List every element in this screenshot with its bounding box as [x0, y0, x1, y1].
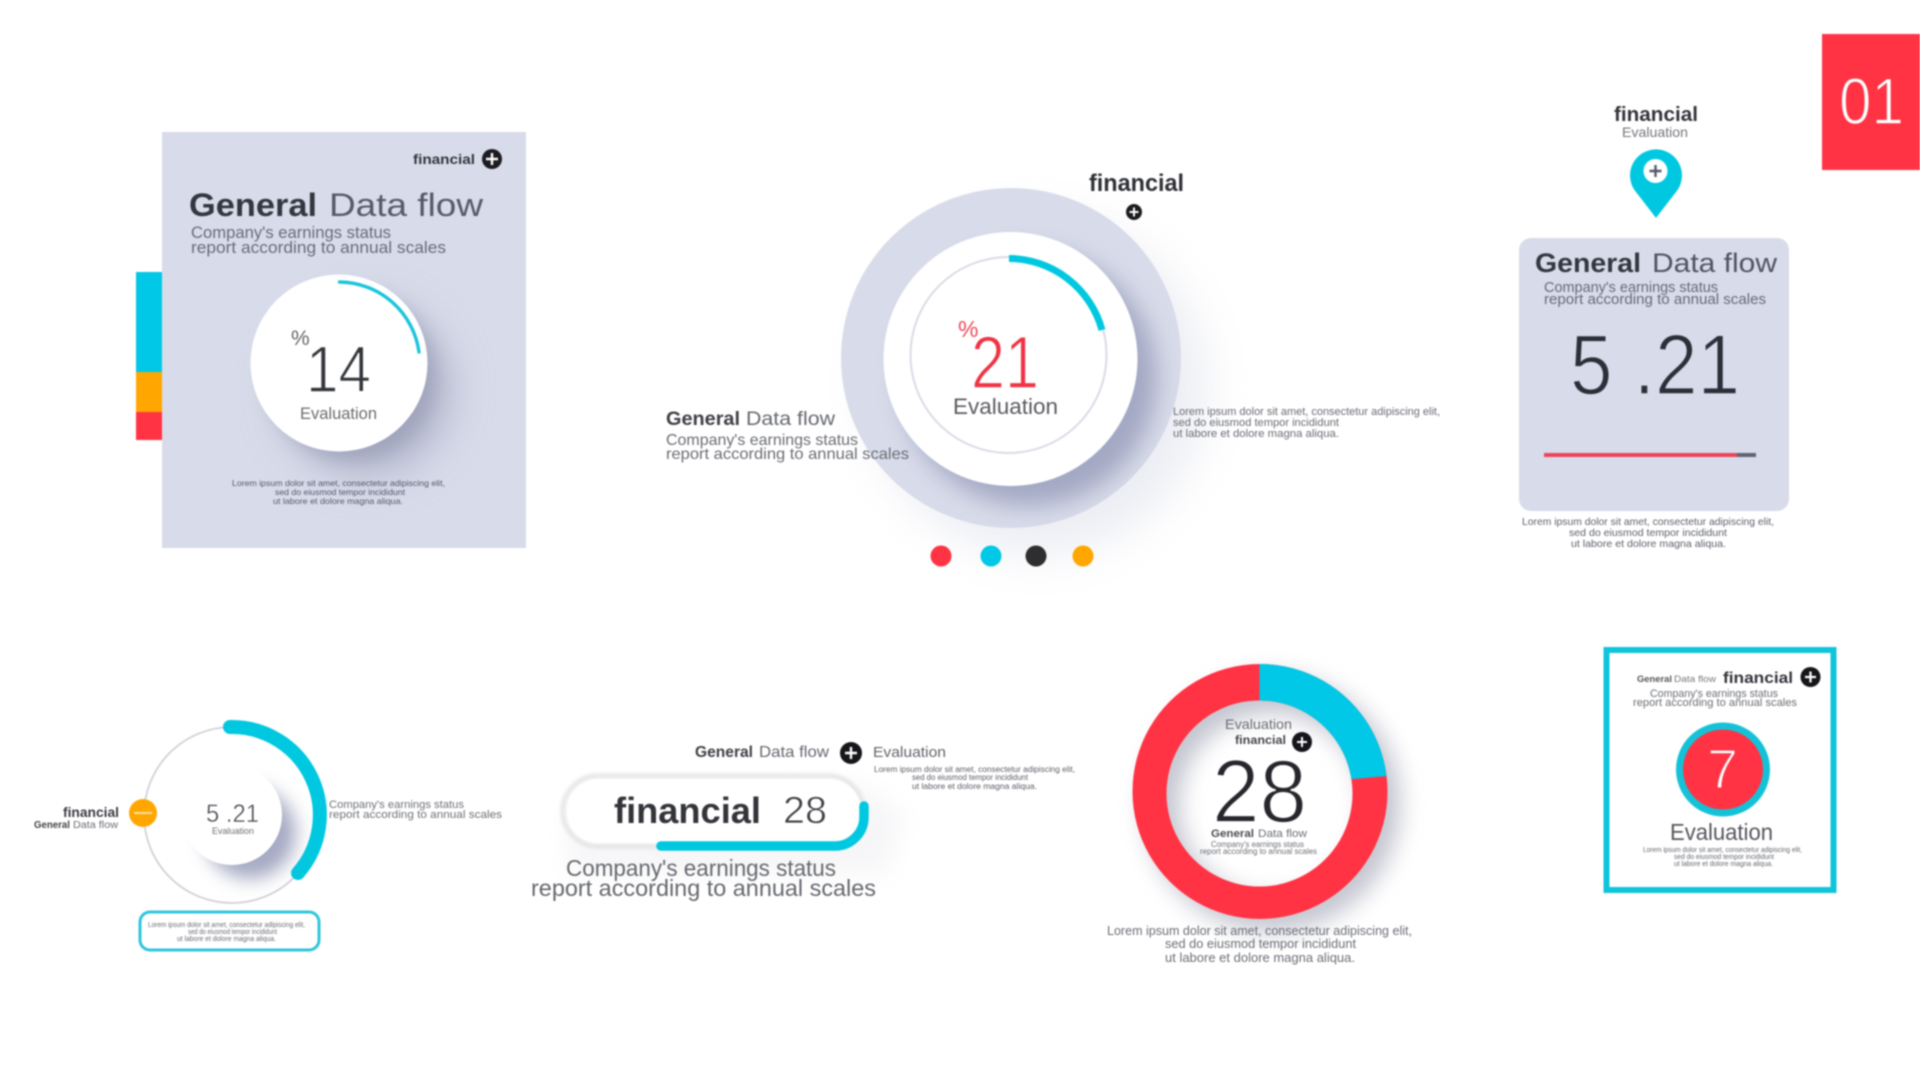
subheading: Company's earnings status — [329, 799, 464, 811]
subheading: report according to annual scales — [666, 446, 909, 463]
card header: General — [1637, 674, 1672, 684]
value: 5.21: 5 .21 — [206, 800, 259, 828]
card header — [1637, 667, 1820, 687]
body text — [1173, 406, 1440, 440]
donut labels: Evaluation — [1225, 716, 1292, 732]
callout box: Lorem ipsum dolor sit amet, consectetur adipiscing elit, — [148, 922, 305, 929]
subheading: report according to annual scales — [191, 239, 446, 257]
value circle: 7 — [1676, 722, 1770, 816]
body text: sed do eiusmod tempor incididunt — [275, 487, 406, 497]
value: 21: Evaluation — [953, 394, 1058, 419]
subheading: report according to annual scales — [1544, 292, 1766, 308]
pill text — [614, 790, 827, 832]
subheading — [191, 224, 446, 257]
callout box — [140, 912, 319, 950]
value: 21: % — [958, 316, 978, 342]
donut segments — [1133, 664, 1388, 919]
donut heading: Data flow — [1258, 828, 1307, 840]
progress bar — [1544, 453, 1756, 457]
inner white disc with arc — [884, 232, 1138, 486]
body text: sed do eiusmod tempor incididunt — [912, 773, 1029, 782]
body text — [232, 478, 445, 506]
icon: location pin with plus — [1630, 149, 1682, 218]
body text: sed do eiusmod tempor incididunt — [1674, 854, 1774, 861]
label: financial with plus icon — [413, 149, 502, 169]
body text: ut labore et dolore magna aliqua. — [1173, 428, 1339, 440]
body text — [874, 765, 1075, 791]
value: 5.21: Evaluation — [212, 826, 254, 836]
subheading: report according to annual scales — [1633, 697, 1797, 709]
pin label — [1614, 104, 1698, 140]
subheading: Company's earnings status — [191, 224, 391, 242]
subheading — [531, 855, 876, 901]
donut labels — [1225, 716, 1312, 752]
icon: orange minus — [129, 799, 157, 827]
subheading — [1544, 280, 1766, 308]
gauge: 14: 14 — [306, 332, 371, 406]
body text: Lorem ipsum dolor sit amet, consectetur adipiscing elit, — [1522, 516, 1774, 528]
card background — [1519, 238, 1789, 511]
pill text: financial — [614, 790, 761, 831]
callout box: ut labore et dolore magna aliqua. — [177, 936, 276, 943]
panel: donut chart 28 — [1107, 664, 1412, 965]
subheading: report according to annual scales — [531, 875, 876, 901]
body text: Lorem ipsum dolor sit amet, consectetur adipiscing elit, — [232, 478, 445, 488]
label: financial with plus icon: financial — [413, 151, 475, 167]
body text: sed do eiusmod tempor incididunt — [1165, 936, 1356, 951]
card header: Data flow — [1674, 674, 1717, 684]
heading — [189, 187, 484, 223]
donut heading — [1200, 828, 1317, 856]
colour strip — [136, 272, 162, 440]
body text: Lorem ipsum dolor sit amet, consectetur adipiscing elit, — [1107, 923, 1412, 938]
body text: ut labore et dolore magna aliqua. — [1165, 950, 1355, 965]
gauge: 14: % — [291, 327, 310, 350]
heading: Data flow — [746, 409, 835, 430]
gauge: 14: Evaluation — [300, 404, 377, 423]
card background — [162, 132, 526, 548]
subheading: Company's earnings status — [666, 432, 858, 449]
heading: Data flow — [1652, 248, 1778, 278]
subheading — [329, 799, 503, 821]
panel: centre gauge 21 percent — [666, 170, 1440, 566]
heading — [666, 409, 835, 430]
card header: financial — [1723, 670, 1793, 687]
pill text: 28 — [783, 790, 827, 832]
heading: General — [189, 187, 317, 223]
pill with arc — [563, 776, 905, 875]
value: 21: 21 — [971, 321, 1039, 404]
panel: top-right card 5.21 — [1519, 104, 1789, 550]
inner disc with shadow — [182, 765, 296, 879]
value: 5.21: 5 .21 — [1570, 318, 1740, 413]
donut shadow — [1145, 676, 1400, 931]
donut labels: financial — [1235, 733, 1286, 747]
value: 28: 28 — [1212, 741, 1307, 841]
outer ring with shadow — [841, 188, 1206, 554]
card frame — [1606, 650, 1834, 890]
badge: slide number 01: 01 — [1839, 64, 1904, 138]
body text: sed do eiusmod tempor incididunt — [1569, 527, 1727, 539]
heading: General — [666, 409, 740, 430]
pin label: Evaluation — [1622, 124, 1688, 140]
badge: slide number 01 — [1822, 34, 1920, 170]
body text: Lorem ipsum dolor sit amet, consectetur adipiscing elit, — [1173, 406, 1440, 418]
body text: ut labore et dolore magna aliqua. — [1571, 538, 1726, 550]
label: financial: financial — [63, 804, 119, 820]
donut heading: report according to annual scales — [1200, 847, 1317, 856]
ring and cyan arc — [144, 727, 320, 903]
evaluation label: Evaluation — [1670, 819, 1773, 845]
subheading — [666, 432, 909, 463]
body text: ut labore et dolore magna aliqua. — [1674, 861, 1773, 868]
subheading: Company's earnings status — [1650, 688, 1778, 700]
legend dots — [930, 546, 1094, 566]
subheading — [1633, 688, 1797, 709]
value: 21 — [953, 316, 1058, 419]
label: financial: Data flow — [73, 820, 119, 831]
gauge: 14 — [250, 274, 450, 474]
body text: sed do eiusmod tempor incididunt — [1173, 417, 1339, 429]
heading — [1535, 248, 1778, 278]
heading: General — [1535, 248, 1641, 278]
header row: General — [695, 744, 753, 761]
callout box: sed do eiusmod tempor incididunt — [188, 929, 277, 936]
body text — [1643, 847, 1802, 868]
subheading: report according to annual scales — [329, 809, 503, 821]
donut heading: Company's earnings status — [1211, 840, 1304, 849]
donut heading: General — [1211, 828, 1254, 840]
body text: ut labore et dolore magna aliqua. — [912, 782, 1037, 791]
label: financial with plus icon: financial — [1089, 170, 1184, 197]
body text: Lorem ipsum dolor sit amet, consectetur adipiscing elit, — [874, 765, 1075, 774]
panel: top-left card 14 percent — [136, 132, 526, 548]
header row: Data flow — [759, 744, 829, 761]
pin label: financial — [1614, 104, 1698, 126]
body text: ut labore et dolore magna aliqua. — [273, 496, 403, 506]
body text: Lorem ipsum dolor sit amet, consectetur adipiscing elit, — [1643, 847, 1802, 854]
subheading: Company's earnings status — [1544, 280, 1718, 296]
heading: Data flow — [329, 187, 484, 223]
body text — [1107, 923, 1412, 965]
body text — [1522, 516, 1774, 550]
panel: bordered card 7 — [1606, 650, 1834, 890]
panel: bottom-left gauge 5.21 — [34, 727, 503, 950]
value circle: 7: 7 — [1707, 737, 1738, 800]
panel: pill financial 28 — [531, 742, 1075, 901]
header row: Evaluation — [873, 744, 946, 761]
label: financial — [34, 804, 119, 831]
subheading: Company's earnings status — [566, 855, 836, 881]
header row — [695, 742, 946, 764]
label: financial: General — [34, 820, 70, 831]
label: financial with plus icon — [1089, 170, 1184, 220]
